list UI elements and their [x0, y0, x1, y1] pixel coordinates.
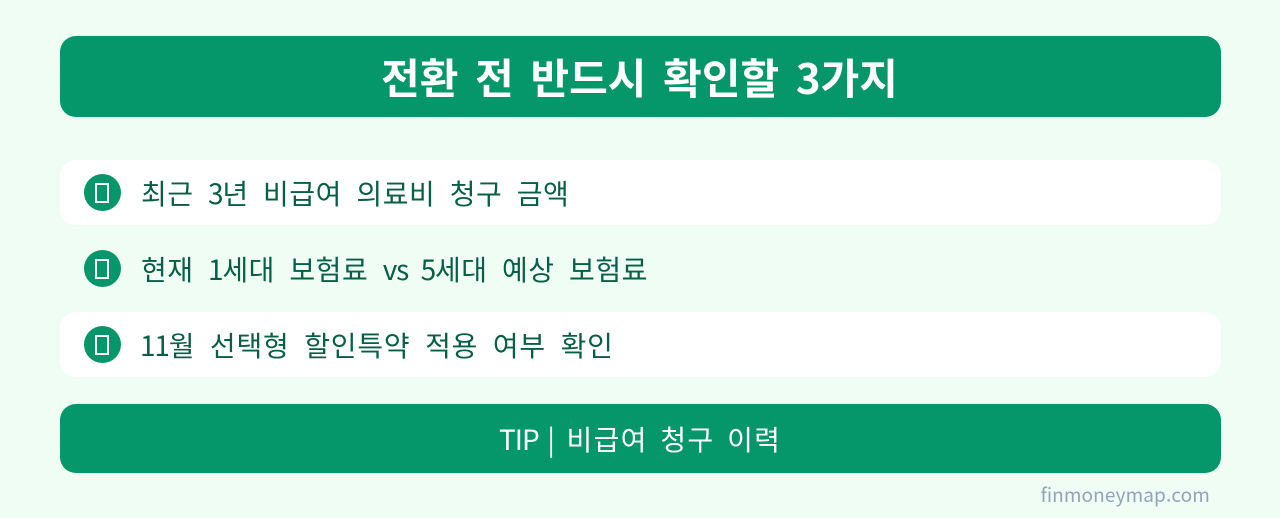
watermark: finmoneymap.com [1041, 481, 1210, 508]
title banner [60, 36, 1221, 117]
title text: 전환 전 반드시 확인할 3가지 [381, 46, 898, 107]
panel: checklist item 2 [84, 248, 648, 288]
item 1 text: 최근 3년 비급여 의료비 청구 금액 [141, 172, 569, 212]
panel: checklist item 1 [60, 160, 1221, 225]
item 2 text: 현재 1세대 보험료 vs 5세대 예상 보험료 [141, 248, 648, 288]
icon: item 3 bullet [84, 326, 121, 363]
item 3 text: 11월 선택형 할인특약 적용 여부 확인 [140, 324, 614, 364]
panel: checklist item 3 [60, 312, 1221, 377]
tip text: TIP | 비급여 청구 이력 [499, 419, 781, 459]
icon: item 2 bullet [84, 250, 121, 287]
tip banner [60, 404, 1221, 473]
icon: item 1 bullet [84, 174, 121, 211]
